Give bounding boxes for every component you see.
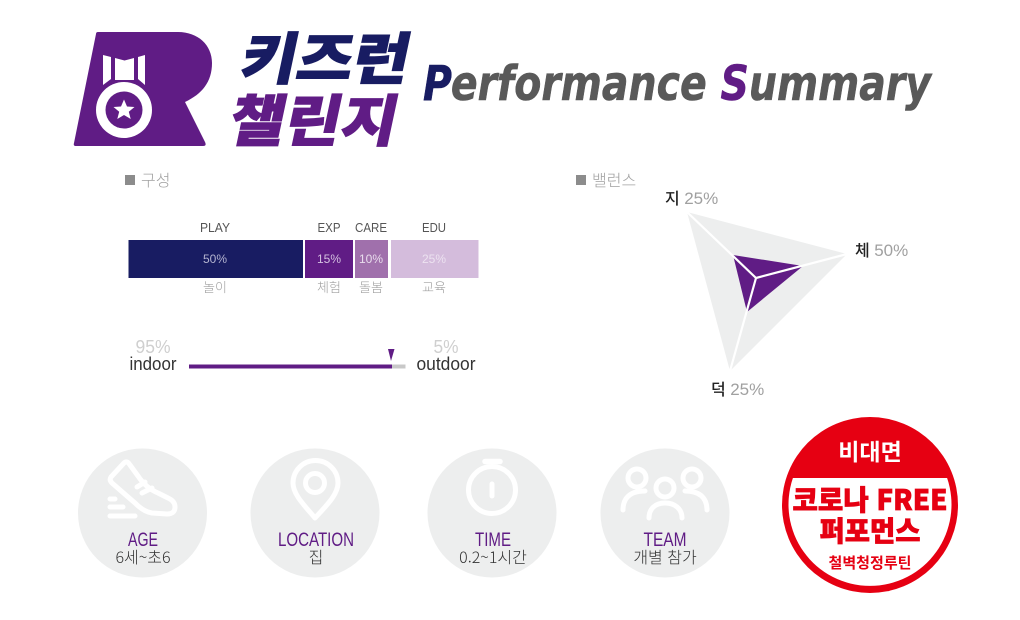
logo: R medal emblem — [74, 32, 212, 146]
radar label: 덕: 덕 25% — [711, 376, 764, 400]
logo title: 키즈런: 키즈런 — [234, 15, 420, 96]
icon: stopwatch — [468, 462, 516, 514]
segment: EDU 25%: 25% — [422, 252, 446, 266]
info circle: TEAM: TEAM — [644, 530, 686, 551]
info circle: TIME: TIME — [475, 530, 511, 551]
radar label: 지: 지 25% — [665, 185, 718, 209]
indoor / outdoor slider: indoor — [130, 354, 176, 374]
radar label: 체: 체 50% — [855, 237, 908, 261]
info circle: LOCATION: LOCATION — [278, 530, 354, 551]
badge: contactless corona free: 비대면 — [838, 433, 902, 467]
segment: PLAY 50% — [128, 220, 303, 296]
indoor / outdoor slider: 5% — [434, 337, 458, 357]
segment: PLAY 50%: PLAY — [200, 220, 230, 235]
indoor / outdoor slider: outdoor — [416, 354, 476, 374]
radar chart: balance — [665, 185, 908, 400]
segment: EDU 25%: 교육 — [422, 277, 446, 296]
badge: contactless corona free — [782, 417, 958, 593]
info circle: AGE — [78, 448, 207, 578]
info circle: AGE: 6세~초6 — [115, 544, 171, 568]
heading: Performance Summary: Performance Summary — [423, 56, 932, 112]
segment: CARE 10%: 10% — [359, 252, 383, 266]
info circle: TEAM — [600, 448, 730, 578]
segment: EDU 25% — [391, 220, 478, 296]
badge: contactless corona free: 철벽청정루틴 — [828, 552, 912, 573]
info circle: TIME — [428, 448, 556, 578]
section heading: 구성: 구성 — [141, 167, 170, 191]
info circle: LOCATION — [250, 448, 380, 578]
marker triangle — [388, 349, 394, 361]
stacked bar: composition — [128, 220, 478, 296]
icon: group of people — [623, 469, 707, 518]
info circle: LOCATION: 집 — [309, 544, 323, 568]
logo title: 챌린지: 챌린지 — [222, 77, 408, 158]
info circle: TEAM: 개별 참가 — [633, 544, 697, 568]
segment: EXP 15%: 체험 — [317, 277, 341, 296]
segment: CARE 10% — [355, 220, 388, 296]
segment: CARE 10%: 돌봄 — [359, 277, 383, 296]
segment: PLAY 50%: 50% — [203, 252, 227, 266]
section heading: 구성 — [125, 167, 170, 191]
indoor / outdoor slider: 95% — [136, 337, 170, 357]
indoor / outdoor slider — [130, 337, 476, 374]
info circle: AGE: AGE — [128, 530, 158, 551]
icon: map pin — [293, 460, 338, 518]
segment: EDU 25%: EDU — [422, 220, 446, 235]
segment: EXP 15% — [305, 220, 353, 296]
segment: EXP 15%: EXP — [318, 220, 340, 235]
segment: PLAY 50%: 놀이 — [203, 277, 227, 296]
section heading: 밸런스: 밸런스 — [592, 167, 636, 191]
icon: running shoe — [110, 462, 175, 516]
segment: CARE 10%: CARE — [355, 220, 387, 235]
badge: contactless corona free: 퍼포먼스 — [820, 510, 920, 550]
segment: EXP 15%: 15% — [317, 252, 341, 266]
badge: contactless corona free: 코로나 FREE — [792, 479, 948, 519]
info circle: TIME: 0.2~1시간 — [459, 544, 527, 568]
